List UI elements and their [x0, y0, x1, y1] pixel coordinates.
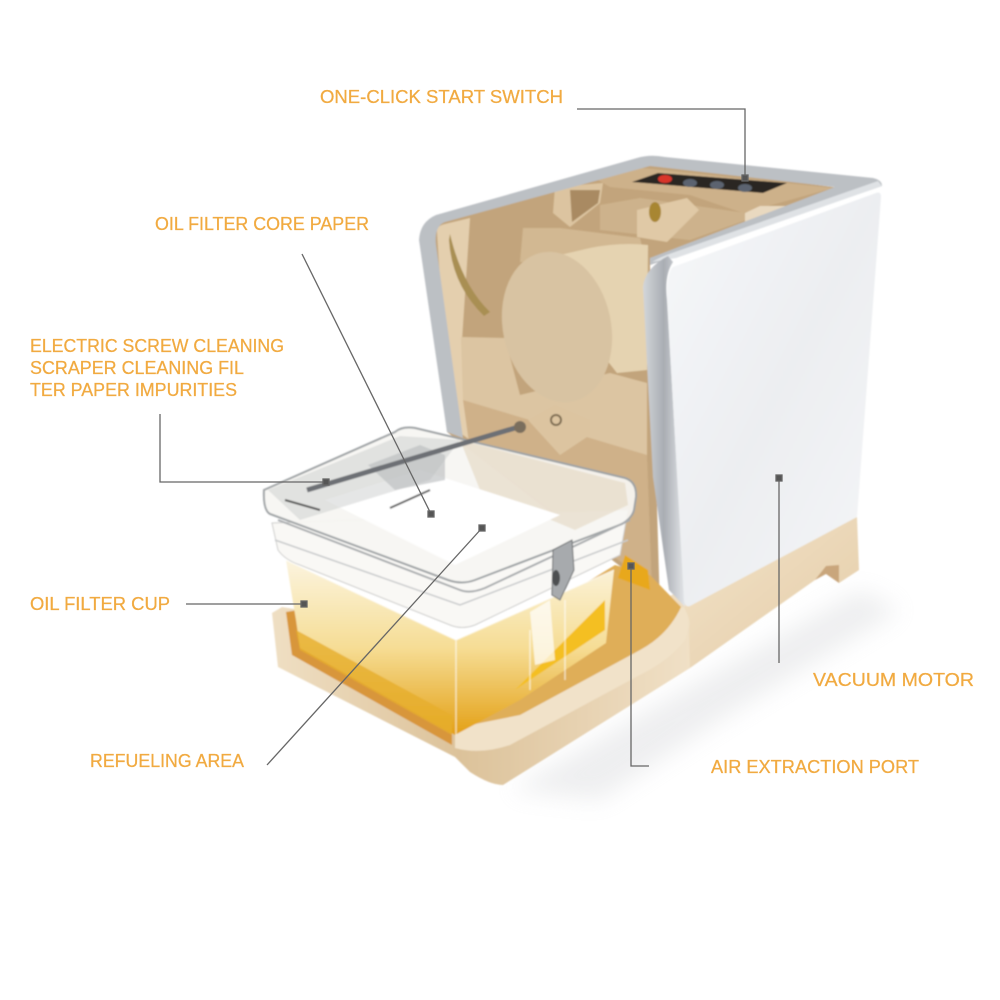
leader: oil filter core paper: [302, 254, 434, 517]
back ledge: [600, 198, 760, 240]
label: air extraction port: AIR EXTRACTION PORT: [711, 756, 919, 777]
lower cup with oil: [286, 560, 614, 735]
tray left rim face: [286, 610, 452, 745]
label: refueling area: REFUELING AREA: [90, 750, 245, 771]
leader: vacuum motor: [776, 475, 782, 663]
bright oil behind cup: [618, 555, 650, 590]
upper filter cup: [264, 428, 636, 628]
machine side panel: [667, 192, 881, 606]
leader: electric screw: [160, 414, 329, 485]
product: oil press machine: [264, 156, 882, 785]
label: electric screw cleaning: ELECTRIC SCREW CLEANING: [30, 335, 284, 356]
lid: [264, 428, 636, 582]
round cap: [488, 241, 626, 413]
lid back window: [460, 440, 628, 530]
tray floor oil sheen: [460, 565, 681, 725]
silver frame: [419, 156, 882, 438]
right stub: [745, 206, 790, 225]
leader: air extraction port: [628, 563, 649, 766]
label: electric screw cleaning: TER PAPER IMPURITIES: [30, 379, 237, 400]
label: one-click start switch: ONE-CLICK START SWITCH: [320, 86, 563, 107]
slotted block: [637, 198, 699, 242]
label: electric screw cleaning: [30, 335, 284, 400]
floor shadow: [510, 590, 900, 800]
label: vacuum motor: VACUUM MOTOR: [813, 669, 974, 690]
machine base: [660, 517, 859, 680]
control panel: [632, 173, 787, 193]
lid mechanism: [268, 436, 460, 520]
central cylinder: [530, 244, 648, 373]
inner left wall: [437, 218, 470, 440]
clamp: [552, 540, 574, 600]
leader: refueling area: [267, 525, 485, 765]
upper block: [520, 228, 643, 262]
leader: oil filter cup: [186, 601, 307, 607]
filter paper: [325, 470, 560, 565]
label: oil filter cup: OIL FILTER CUP: [30, 593, 170, 614]
tower bracket: [553, 183, 603, 227]
ledge box: [461, 337, 647, 505]
machine top plate: [598, 167, 833, 213]
top strip highlight: [652, 181, 882, 262]
label: electric screw cleaning: SCRAPER CLEANING FIL: [30, 357, 244, 378]
lower bracket: [528, 405, 590, 455]
arc rib: [449, 234, 490, 316]
label: oil filter core paper: OIL FILTER CORE PAPER: [155, 213, 369, 234]
tray top surface: [455, 607, 688, 751]
machine inner cavity: [432, 162, 840, 610]
front silver post: [643, 256, 685, 607]
leader: one-click start switch: [577, 109, 748, 181]
tray base: [272, 607, 690, 785]
lower cavity: [463, 400, 652, 590]
screw rod: [307, 428, 515, 490]
